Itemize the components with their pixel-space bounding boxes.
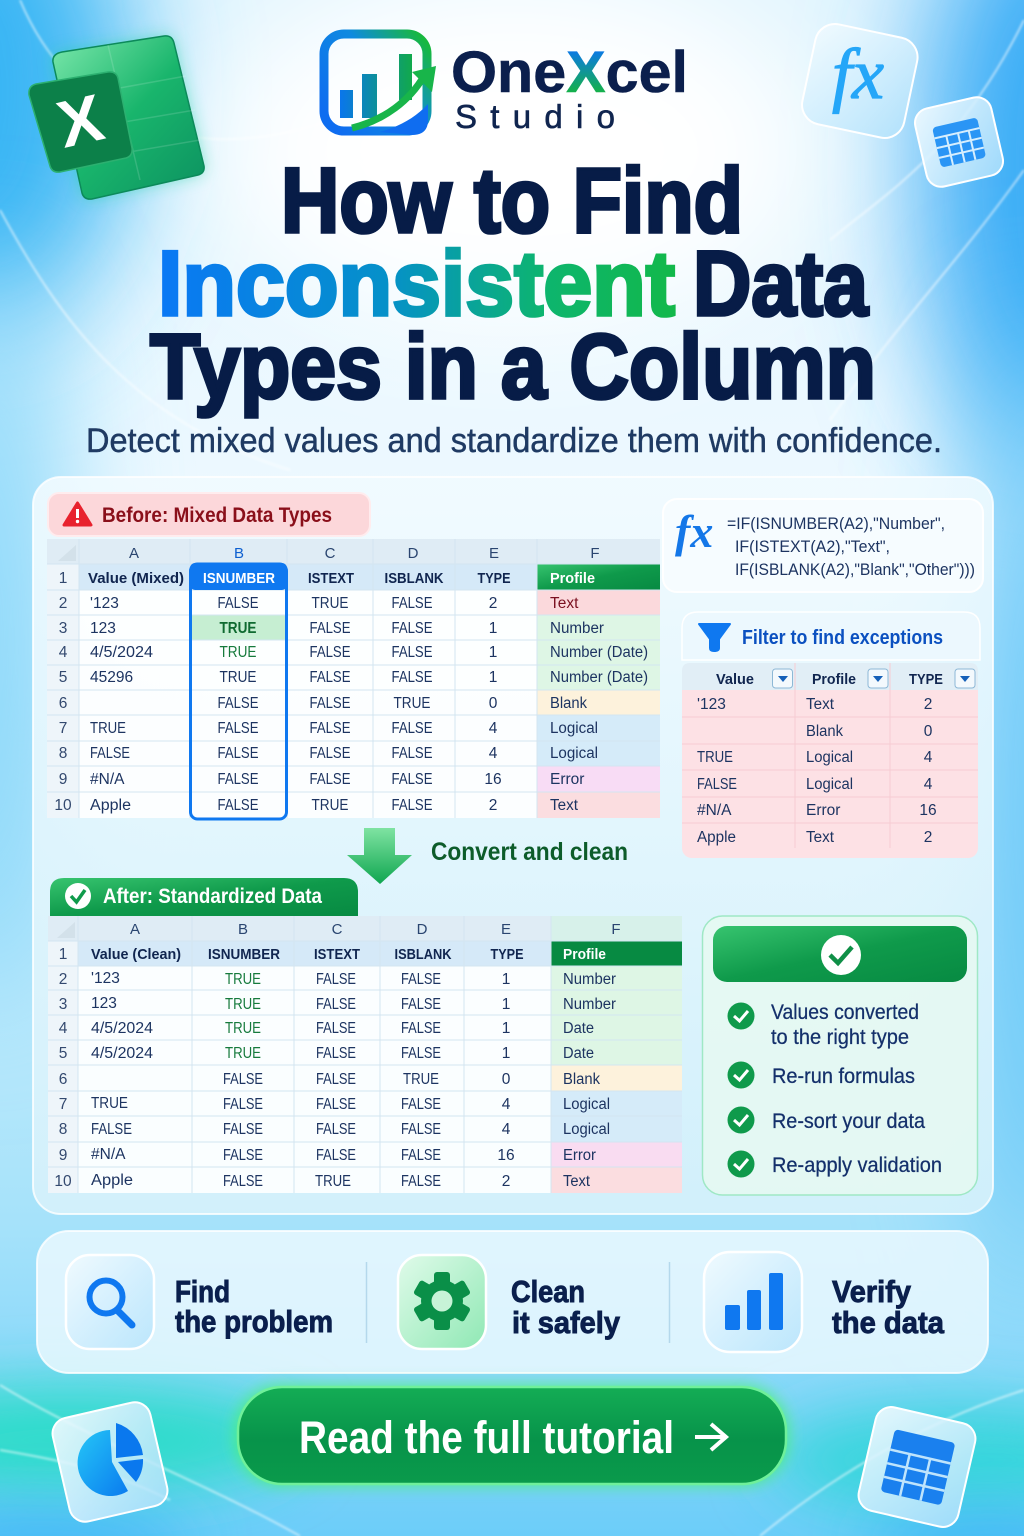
step: verify: Verify: [832, 1274, 912, 1309]
column letters: D: [408, 545, 419, 562]
icon: funnel: [699, 624, 730, 651]
cells: Text: [806, 696, 835, 713]
logo: [324, 34, 688, 135]
item: re-apply validation: Re-apply validation: [772, 1154, 942, 1177]
column letters: [130, 921, 621, 938]
cells: FALSE: [316, 996, 356, 1013]
cells: FALSE: [316, 1045, 356, 1062]
cells: FALSE: [697, 776, 737, 793]
row numbers: 2: [59, 971, 67, 988]
cells: 4: [924, 749, 933, 766]
cells: FALSE: [218, 695, 258, 712]
cells: TRUE: [403, 1071, 439, 1088]
cells: Logical: [550, 745, 598, 762]
step: clean: Clean: [511, 1274, 585, 1309]
table: before: [47, 539, 660, 819]
cells: Date: [563, 1020, 594, 1037]
cells: TRUE: [220, 644, 256, 661]
row numbers: 10: [54, 1173, 72, 1190]
steps panel: [37, 1231, 988, 1373]
item: re-apply validation: [728, 1150, 942, 1178]
cells: FALSE: [316, 1096, 356, 1113]
header row: [88, 570, 595, 587]
arrow: convert: [347, 828, 412, 884]
cells: [91, 970, 616, 1190]
convert label: Convert and clean: [431, 838, 628, 866]
icon: fx: fx: [675, 506, 713, 557]
cells: FALSE: [401, 1121, 441, 1138]
row numbers: 4: [59, 644, 68, 661]
row numbers: 4: [59, 1020, 68, 1037]
cells: FALSE: [310, 695, 350, 712]
row numbers: 6: [59, 1071, 67, 1088]
title: Types in a Column: [150, 316, 876, 418]
cells: FALSE: [310, 644, 350, 661]
cells: TRUE: [225, 996, 261, 1013]
cells: Number (Date): [550, 669, 648, 686]
cells: 1: [502, 996, 510, 1013]
icon: bars: [704, 1252, 802, 1352]
column letters: D: [417, 921, 428, 938]
cells: 2: [489, 797, 497, 814]
cells: Logical: [550, 720, 598, 737]
cells: Logical: [563, 1121, 610, 1138]
row numbers: 7: [59, 1096, 67, 1113]
cells: Blank: [563, 1071, 600, 1088]
table: exceptions: [682, 663, 978, 858]
column letters: E: [501, 921, 511, 938]
checklist panel: [702, 916, 978, 1195]
cells: FALSE: [218, 745, 258, 762]
cells: #N/A: [697, 802, 732, 819]
cells: FALSE: [218, 797, 258, 814]
cells: Text: [550, 595, 579, 612]
call to action button: Read the full tutorial: [299, 1412, 674, 1463]
formula text: =IF(ISNUMBER(A2),"Number",: [727, 515, 945, 533]
cells: FALSE: [223, 1121, 263, 1138]
cells: TRUE: [315, 1173, 351, 1190]
icon: excel app: [29, 36, 204, 199]
table: after: [48, 916, 682, 1193]
icon: check: [65, 883, 91, 909]
call to action button: [236, 1386, 788, 1485]
cells: 1: [489, 669, 497, 686]
cells: FALSE: [310, 720, 350, 737]
cells: FALSE: [218, 771, 258, 788]
row numbers: 9: [59, 771, 67, 788]
cells: Number (Date): [550, 644, 648, 661]
header row: Value: [716, 671, 754, 688]
row numbers: 1: [59, 946, 67, 963]
column letters: E: [489, 545, 499, 562]
before tab: Before: Mixed Data Types: [102, 504, 332, 527]
cells: TRUE: [697, 749, 733, 766]
cells: Number: [563, 996, 616, 1013]
cells: #N/A: [90, 771, 125, 788]
row numbers: 2: [59, 595, 67, 612]
header row: ISNUMBER: [203, 570, 275, 587]
column letters: B: [234, 545, 244, 562]
cells: 4/5/2024: [90, 644, 153, 661]
cells: FALSE: [401, 1147, 441, 1164]
step: clean: [398, 1255, 621, 1349]
cells: 2: [924, 829, 932, 846]
item: values converted: to the right type: [771, 1026, 909, 1049]
cells: 2: [924, 696, 932, 713]
icon: table card: [855, 1404, 979, 1530]
item: values converted: Values converted: [771, 1001, 919, 1024]
cells: FALSE: [310, 669, 350, 686]
after tab: [50, 878, 358, 916]
cells: Error: [550, 771, 584, 788]
header row: TYPE: [909, 671, 943, 688]
cells: '123: [91, 970, 120, 987]
cells: TRUE: [225, 1020, 261, 1037]
cells: FALSE: [401, 1020, 441, 1037]
title: Data: [693, 233, 869, 335]
subtitle: Detect mixed values and standardize them with confidence.: [86, 422, 942, 460]
cells: Blank: [550, 695, 587, 712]
cells: [697, 696, 937, 846]
cells: 1: [489, 620, 497, 637]
item: re-sort data: Re-sort your data: [772, 1110, 925, 1133]
step: find: [66, 1255, 333, 1349]
wordmark: studio: Studio: [455, 98, 615, 135]
cells: 16: [919, 802, 937, 819]
cells: Apple: [91, 1172, 133, 1189]
header row: Value (Mixed): [88, 570, 184, 587]
cells: FALSE: [218, 720, 258, 737]
checklist header: [713, 926, 967, 982]
cells: Error: [806, 802, 840, 819]
cells: Apple: [90, 797, 131, 814]
row numbers: 10: [54, 797, 72, 814]
cells: FALSE: [223, 1147, 263, 1164]
step: verify: the data: [832, 1305, 945, 1340]
cells: TRUE: [225, 1045, 261, 1062]
cells: FALSE: [223, 1173, 263, 1190]
header row: Value (Clean): [91, 946, 181, 963]
item: re-run formulas: Re-run formulas: [772, 1065, 915, 1088]
cells: TRUE: [225, 971, 261, 988]
icon: fx card: [798, 20, 921, 142]
cells: 2: [502, 1173, 510, 1190]
cells: Blank: [806, 723, 843, 740]
cells: FALSE: [401, 1045, 441, 1062]
cells: FALSE: [223, 1071, 263, 1088]
cells: FALSE: [401, 971, 441, 988]
item: re-sort data: [728, 1106, 925, 1134]
cells: Text: [550, 797, 579, 814]
filter header: [682, 612, 980, 660]
filter label: Filter to find exceptions: [742, 627, 943, 649]
cells: 0: [489, 695, 498, 712]
cells: 4/5/2024: [91, 1020, 153, 1037]
cells: FALSE: [401, 1173, 441, 1190]
cells: FALSE: [316, 1147, 356, 1164]
cells: TRUE: [90, 720, 126, 737]
header row: [91, 946, 606, 963]
cells: FALSE: [392, 595, 432, 612]
cells: FALSE: [392, 644, 432, 661]
formula text: IF(ISBLANK(A2),"Blank","Other"))): [735, 561, 975, 579]
cells: 45296: [90, 669, 133, 686]
header row: ISBLANK: [394, 946, 452, 963]
cells: Logical: [806, 749, 853, 766]
before tab: [48, 493, 370, 536]
row numbers: 3: [59, 996, 67, 1013]
title: [150, 150, 876, 418]
column letters: [129, 545, 600, 562]
cells: Logical: [563, 1096, 610, 1113]
cells: 123: [91, 995, 117, 1012]
row numbers: 8: [59, 1121, 67, 1138]
cells: TRUE: [312, 797, 348, 814]
cells: 1: [502, 1045, 510, 1062]
formula text: IF(ISTEXT(A2),"Text",: [735, 538, 890, 556]
cells: Number: [563, 971, 616, 988]
after tab: After: Standardized Data: [103, 885, 322, 908]
cells: TRUE: [312, 595, 348, 612]
icon: fx card: fx: [832, 34, 884, 114]
wordmark: OneXcel: [451, 40, 688, 105]
cells: FALSE: [392, 720, 432, 737]
cells: Logical: [806, 776, 853, 793]
cells: FALSE: [401, 1096, 441, 1113]
icon: magnifier: [66, 1255, 154, 1349]
item: re-run formulas: [728, 1062, 915, 1088]
cells: 0: [924, 723, 933, 740]
row numbers: 6: [59, 695, 67, 712]
header row: Profile: [563, 946, 606, 963]
column letters: F: [611, 921, 621, 938]
row numbers: 5: [59, 1045, 67, 1062]
cells: 123: [90, 620, 116, 637]
column letters: A: [130, 921, 140, 938]
step: find: Find: [175, 1274, 230, 1309]
cells: 2: [489, 595, 497, 612]
cells: Apple: [697, 829, 736, 846]
cells: FALSE: [91, 1121, 132, 1138]
cells: [90, 595, 648, 814]
step: verify: [704, 1252, 945, 1352]
row numbers: 1: [59, 570, 67, 587]
cells: FALSE: [316, 1121, 356, 1138]
step: find: the problem: [175, 1304, 333, 1339]
cells: TRUE: [220, 669, 256, 686]
header row: TYPE: [478, 570, 510, 587]
cells: Number: [550, 620, 604, 637]
icon: excel app: X: [51, 80, 110, 162]
cells: FALSE: [310, 745, 350, 762]
cells: 1: [489, 644, 497, 661]
cells: 16: [484, 771, 502, 788]
row numbers: [54, 570, 72, 814]
header row: ISNUMBER: [208, 946, 280, 963]
cells: Text: [563, 1173, 591, 1190]
cells: FALSE: [90, 745, 130, 762]
cells: TRUE: [91, 1095, 128, 1112]
cells: TRUE: [394, 695, 430, 712]
icon: arrow: [695, 1424, 726, 1450]
item: values converted: [728, 1001, 919, 1049]
main panel: [33, 477, 993, 1214]
formula text: [727, 515, 975, 579]
header row: ISTEXT: [314, 946, 360, 963]
cells: 4: [489, 720, 498, 737]
cells: FALSE: [316, 971, 356, 988]
header row: TYPE: [490, 946, 524, 963]
cells: 1: [502, 1020, 510, 1037]
cells: FALSE: [392, 620, 432, 637]
cells: #N/A: [91, 1146, 126, 1163]
column letters: C: [332, 921, 343, 938]
cells: FALSE: [316, 1071, 356, 1088]
cells: 4: [489, 745, 498, 762]
cells: FALSE: [401, 996, 441, 1013]
cells: FALSE: [218, 595, 258, 612]
row numbers: [54, 946, 72, 1190]
highlighted column B: [190, 563, 287, 819]
cells: FALSE: [310, 620, 350, 637]
cells: 4: [924, 776, 933, 793]
cells: FALSE: [316, 1020, 356, 1037]
cells: '123: [90, 595, 119, 612]
cells: 4/5/2024: [91, 1045, 153, 1062]
header row: [716, 671, 943, 688]
cells: FALSE: [223, 1096, 263, 1113]
cells: FALSE: [392, 745, 432, 762]
icon: pie chart card: [49, 1399, 171, 1525]
filter dropdowns: [772, 669, 975, 688]
row numbers: 8: [59, 745, 67, 762]
cells: 0: [502, 1071, 511, 1088]
header row: ISBLANK: [384, 570, 444, 587]
title: How to Find: [281, 150, 743, 252]
header row: Profile: [550, 570, 595, 587]
column letters: B: [238, 921, 248, 938]
cells: 1: [502, 971, 510, 988]
cells: '123: [697, 696, 726, 713]
column letters: F: [590, 545, 600, 562]
formula box: [663, 499, 983, 592]
title: Inconsistent: [158, 233, 675, 335]
cells: Date: [563, 1045, 594, 1062]
cells: TRUE: [220, 620, 256, 637]
cells: 16: [497, 1147, 515, 1164]
column letters: A: [129, 545, 139, 562]
cells: Error: [563, 1147, 596, 1164]
cells: FALSE: [392, 771, 432, 788]
cells: Text: [806, 829, 835, 846]
header row: Profile: [812, 671, 856, 688]
icon: warning: [64, 503, 91, 525]
row numbers: 7: [59, 720, 67, 737]
cells: FALSE: [392, 797, 432, 814]
cells: FALSE: [310, 771, 350, 788]
cells: 4: [502, 1096, 511, 1113]
row numbers: 5: [59, 669, 67, 686]
cells: 4: [502, 1121, 511, 1138]
icon: table card: [912, 94, 1006, 190]
row numbers: 9: [59, 1147, 67, 1164]
icon: gear: [398, 1255, 486, 1349]
header row: ISTEXT: [308, 570, 354, 587]
cells: FALSE: [392, 669, 432, 686]
step: clean: it safely: [512, 1305, 621, 1340]
row numbers: 3: [59, 620, 67, 637]
logo mark: [324, 34, 436, 135]
column letters: C: [325, 545, 336, 562]
